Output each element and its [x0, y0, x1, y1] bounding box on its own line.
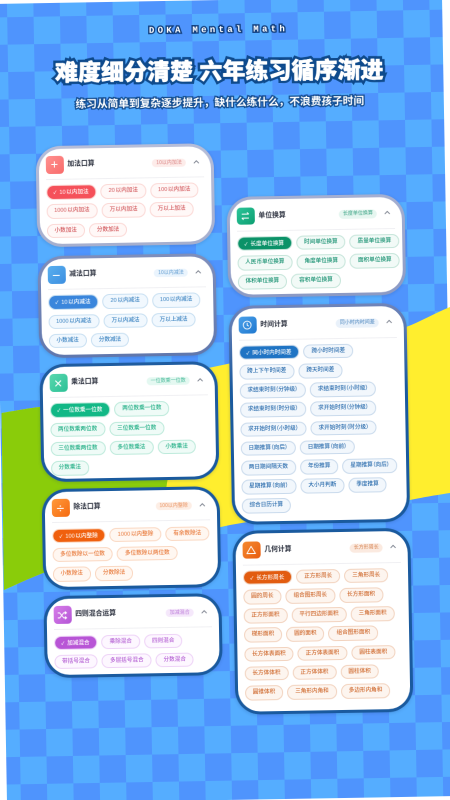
level chips [237, 234, 400, 290]
current level tag: 加减混合 [170, 610, 190, 616]
level chips: 三角形面积 [359, 610, 387, 617]
level chips: 正方形周长 [304, 573, 332, 580]
icon: chevron [201, 610, 208, 614]
level chips: 平行四边形面积 [299, 611, 339, 618]
icon: chevron [386, 320, 392, 324]
icon: clock [239, 316, 257, 334]
level chips: 小数乘法 [165, 444, 188, 450]
level chips: 1000以内减法 [56, 318, 92, 325]
level chips: 两位数乘一位数 [122, 406, 162, 412]
level chips: 求开始时刻（时分级） [318, 424, 369, 431]
level chips: 100以内加法 [158, 187, 190, 193]
level chips: 1000以内整除 [118, 531, 153, 537]
level chips: 梯形面积 [252, 632, 274, 638]
level chips: 星期推算（向后） [350, 462, 390, 469]
level chips: 长方体表面积 [252, 651, 286, 657]
level chips: 容积单位换算 [299, 277, 333, 284]
level chips: 面积单位换算 [358, 257, 392, 264]
level chips [243, 568, 396, 701]
level chips: 年份推算 [308, 463, 330, 470]
icon: chevron [199, 503, 206, 506]
level chips: 10以内减法 [61, 300, 91, 306]
level chips: 多位数除以一位数 [60, 551, 105, 558]
icon: divide [52, 499, 70, 517]
level chips: 长度单位换算 [250, 241, 284, 247]
level chips: 求开始时刻（分钟级） [318, 405, 369, 412]
panel: geometry [232, 528, 414, 715]
level chips: 综合日历计算 [249, 502, 283, 509]
level chips: 有余数除法 [173, 530, 201, 537]
icon: plus [46, 156, 64, 174]
icon: triangle [243, 541, 260, 559]
level chips: 20以内减法 [111, 298, 140, 304]
level chips [54, 634, 194, 669]
panel: multiplication [39, 361, 219, 482]
level chips: 长方体体积 [252, 670, 280, 676]
level chips: 分数加法 [97, 226, 119, 233]
level chips: 同小时内时间差 [252, 350, 292, 356]
level chips: 跨小时时间差 [311, 348, 345, 354]
level chips [239, 344, 398, 514]
title: 难度细分清楚 六年练习循序渐进 [55, 57, 384, 85]
heading: 加法口算 [67, 160, 95, 168]
level chips: 一位数乘一位数 [63, 408, 102, 414]
level chips: 分数减法 [99, 337, 121, 343]
level chips: 大小月判断 [308, 482, 336, 489]
level chips: 四则混合 [152, 637, 174, 644]
icon: chevron [194, 160, 200, 164]
icon: minus [48, 266, 65, 284]
level chips: 星期推算（向前） [249, 483, 288, 490]
level chips: 分数乘法 [59, 465, 81, 471]
heading: 除法口算 [73, 504, 101, 511]
level chips: 万以上减法 [160, 316, 188, 323]
heading: 单位换算 [258, 212, 286, 219]
level chips [48, 292, 200, 348]
brand line: DOKA Mental Math [149, 24, 288, 36]
level chips: 角度单位换算 [304, 258, 338, 265]
level chips: 两日期间隔天数 [249, 464, 288, 471]
level chips: 多边形内角和 [349, 687, 382, 694]
level chips: 万以内加法 [110, 207, 138, 213]
background wave: yellow and green band [2, 307, 450, 590]
level chips: 求结束时刻（分钟级） [247, 387, 298, 394]
level chips: 组合图形周长 [293, 592, 327, 599]
icon: exchange [237, 207, 255, 225]
level chips: 圆柱体积 [348, 668, 371, 675]
current level tag: 100以内整除 [159, 503, 188, 509]
current level tag: 10以内减法 [158, 269, 184, 276]
level chips: 跨天时间差 [306, 367, 334, 374]
level chips: 时间单位换算 [304, 239, 338, 245]
level chips: 万以上加法 [158, 206, 186, 213]
heading: 时间计算 [260, 321, 288, 328]
level chips: 分数除法 [103, 570, 125, 576]
level chips: 加减混合 [67, 640, 90, 646]
panel: subtraction [37, 253, 217, 358]
current level tag [166, 608, 194, 617]
level chips: 季度推算 [356, 482, 379, 488]
icon: chevron [195, 270, 202, 274]
level chips: 20以内加法 [109, 188, 138, 194]
level chips: 人民币单位换算 [245, 259, 285, 266]
level chips: 正方体表面积 [306, 650, 339, 656]
level chips: 多位数乘法 [117, 444, 146, 451]
level chips: 三角形周长 [352, 572, 380, 579]
level chips: 10以内加法 [59, 190, 89, 196]
level chips: 三角形内角和 [295, 688, 329, 695]
level chips: 三位数乘两位数 [58, 445, 98, 452]
panel: mixed operations [43, 593, 223, 678]
level chips: 日期推算（向后） [248, 445, 288, 451]
level chips: 圆柱表面积 [359, 649, 387, 655]
current level tag [152, 158, 186, 167]
panel: unit conversion [227, 194, 406, 298]
level chips: 长方形周长 [256, 575, 284, 581]
subtitle: 练习从简单到复杂逐步提升，缺什么练什么，不浪费孩子时间 [75, 95, 364, 111]
icon: chevron [390, 544, 396, 548]
level chips: 组合图形面积 [337, 630, 370, 637]
level chips: 正方形面积 [251, 612, 279, 619]
panel: division [42, 486, 221, 590]
icon: chevron [197, 378, 203, 382]
current level tag [350, 543, 383, 553]
current level tag: 10以内加法 [156, 159, 182, 166]
icon: times [50, 374, 67, 392]
level chips: 1000以内加法 [54, 208, 90, 214]
level chips: 求开始时刻（小时级） [248, 425, 299, 432]
current level tag [155, 501, 192, 511]
level chips: 多位数除以两位数 [125, 550, 170, 557]
level chips [46, 182, 198, 238]
level chips: 正方体体积 [300, 669, 328, 676]
heading: 乘法口算 [71, 379, 98, 386]
heading: 四则混合运算 [75, 610, 116, 618]
current level tag: 一位数乘一位数 [151, 377, 186, 384]
icon: chevron [384, 210, 390, 214]
current level tag [336, 318, 379, 328]
current level tag [339, 209, 377, 219]
level chips: 日期推算（向前） [308, 444, 347, 450]
heading: 减法口算 [69, 271, 97, 278]
current level tag [147, 376, 190, 386]
level chips: 小数减法 [56, 337, 79, 344]
level chips: 带括号混合 [62, 658, 90, 665]
current level tag: 长度单位换算 [343, 210, 373, 217]
current level tag: 同小时内时间差 [340, 320, 375, 326]
level chips [50, 401, 196, 476]
level chips: 三位数乘一位数 [117, 425, 156, 432]
level chips: 圆锥体积 [253, 689, 275, 696]
level chips: 分数混合 [164, 656, 186, 663]
level chips: 100以内减法 [160, 297, 192, 304]
level chips: 乘除混合 [110, 638, 132, 645]
level chips: 两位数乘两位数 [58, 426, 97, 433]
panel: time calculation [229, 303, 410, 525]
level chips: 质量单位换算 [358, 238, 391, 244]
level chips: 万以内减法 [112, 317, 140, 324]
level chips: 体积单位换算 [246, 278, 279, 285]
level chips: 求结束时刻（时分级） [248, 406, 298, 413]
level chips: 跨上下午时间差 [247, 368, 286, 375]
level chips: 小数加法 [54, 227, 77, 234]
heading: 几何计算 [264, 546, 292, 553]
level chips: 长方形面积 [347, 591, 375, 598]
current level tag [154, 268, 188, 278]
level chips: 多层括号混合 [110, 657, 144, 664]
level chips: 小数除法 [60, 570, 83, 577]
current level tag: 长方形周长 [354, 545, 379, 551]
level chips [52, 526, 210, 582]
level chips: 100以内整除 [65, 533, 98, 539]
panel: addition [36, 143, 215, 247]
level chips: 求结束时刻（小时级） [318, 386, 368, 393]
level chips: 圆的周长 [251, 593, 274, 600]
level chips: 圆的面积 [294, 631, 317, 637]
icon: shuffle [54, 606, 71, 624]
